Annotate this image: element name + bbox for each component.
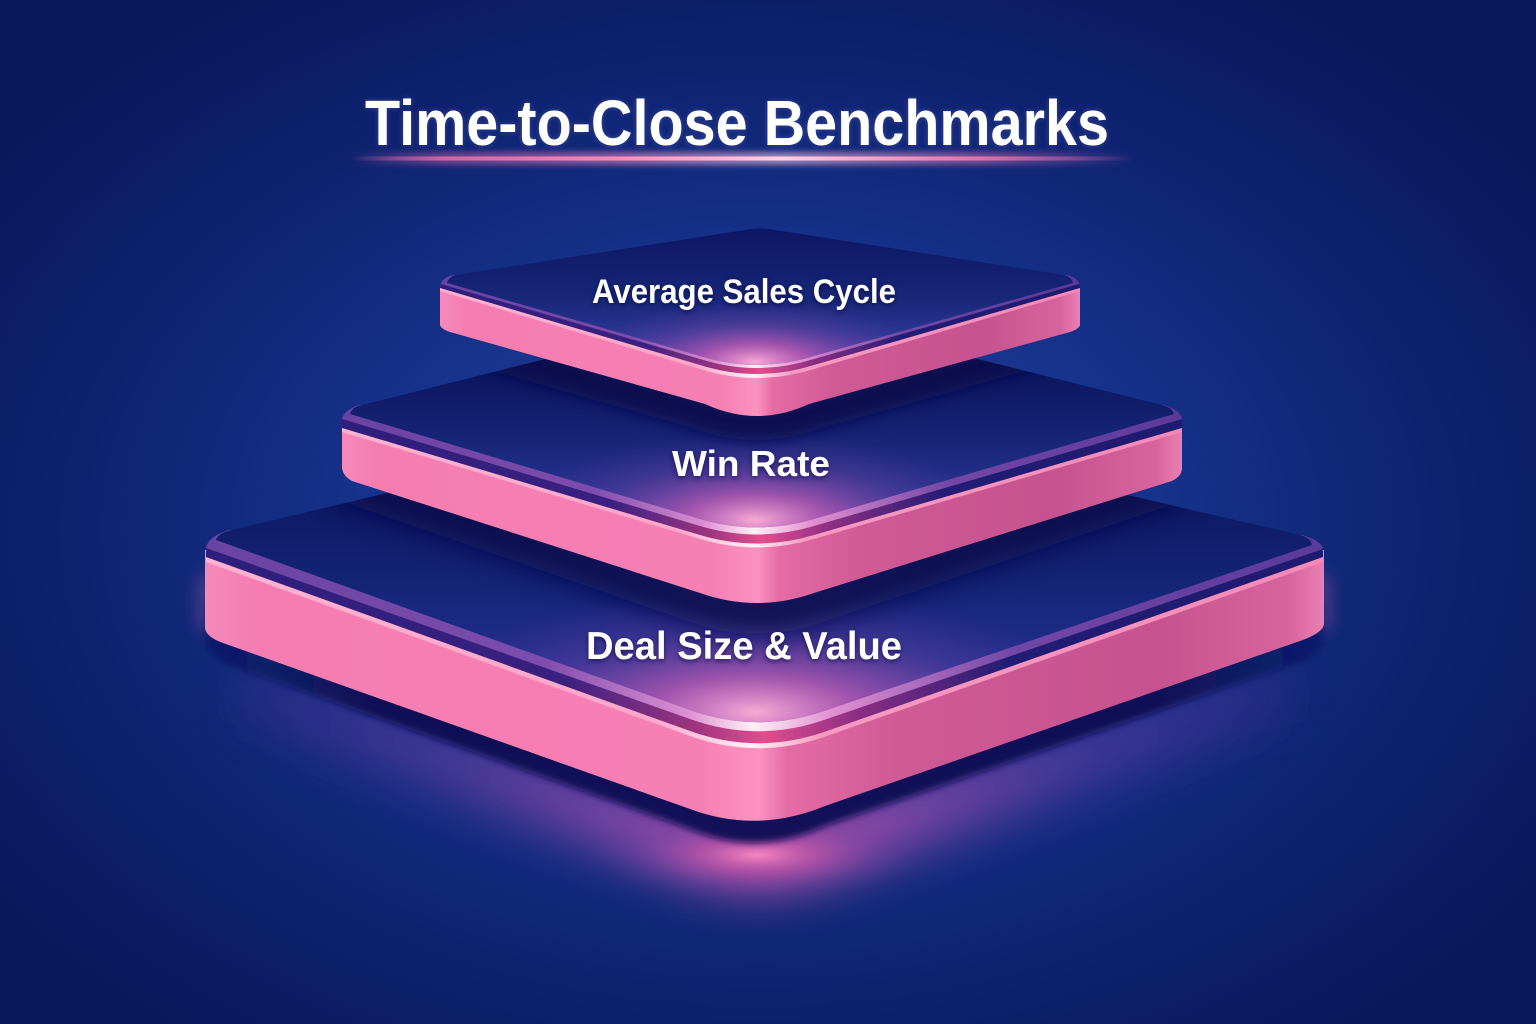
title underline <box>350 152 1135 165</box>
tier 2 side wall <box>342 424 1182 603</box>
label: win rate: Win Rate <box>672 443 830 484</box>
tier 2 dark band <box>342 405 1182 544</box>
tier 1 edge highlight <box>440 275 1080 378</box>
tier 2 edge highlight <box>342 405 1182 548</box>
tier 3: deal size and value <box>205 492 1324 821</box>
tier 1: average sales cycle <box>440 228 1080 424</box>
tier 3 dark band <box>206 530 1323 743</box>
tier 1 side wall <box>440 288 1080 416</box>
tier 3 top face <box>216 404 1312 722</box>
tier 2 rim <box>342 405 1182 534</box>
tier 3 edge highlight <box>206 530 1323 748</box>
tier 1 dark band <box>440 275 1080 374</box>
tier 1 top face <box>447 228 1073 365</box>
tier 3 side wall <box>205 550 1324 821</box>
tier 2: win rate <box>342 358 1182 603</box>
label: deal size and value: Deal Size & Value <box>586 625 902 668</box>
tier 1 face glow <box>626 307 887 365</box>
title: Time-to-Close Benchmarks <box>365 87 1109 159</box>
label: average sales cycle: Average Sales Cycle <box>592 273 896 311</box>
floor glow under platform <box>205 575 1324 901</box>
platform shadow <box>205 600 1324 843</box>
tier 3 face glow <box>341 492 1180 722</box>
tier 3 rim <box>206 530 1323 731</box>
tier 1 rim <box>441 275 1079 368</box>
tier 2 face glow <box>489 358 1029 528</box>
tier 2 top face <box>350 305 1174 528</box>
